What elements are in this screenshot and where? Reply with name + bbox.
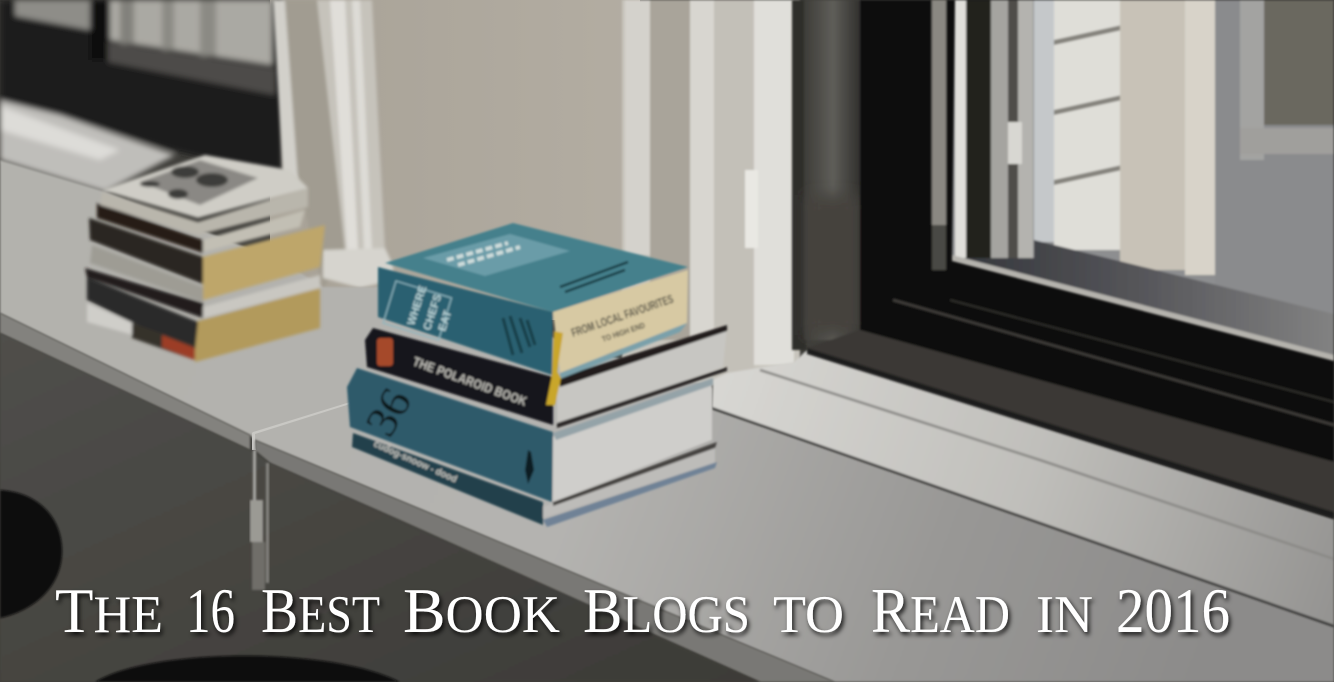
title: THE [55, 575, 163, 646]
window moulding [712, 350, 1334, 626]
cabinet seam and hinge [250, 450, 269, 590]
title [55, 575, 1230, 646]
book 4 bottom blue [352, 433, 717, 527]
column near left window [273, 0, 393, 290]
sill seam [252, 402, 350, 450]
book 3 blue [347, 368, 717, 506]
title: BEST [261, 575, 380, 646]
book 1 teal top: EAT [436, 309, 454, 333]
cabinet below the sill [0, 333, 760, 682]
spine text: cudog-snoow - dood [372, 439, 458, 485]
sill surface [0, 160, 1334, 682]
top book [100, 188, 308, 235]
title: IN [1036, 586, 1093, 644]
cover title lines [447, 243, 520, 265]
bottom yellow book [195, 288, 320, 362]
dark red book [97, 203, 203, 253]
number 36 on spine: 36 [356, 380, 421, 444]
title: BOOK [403, 575, 560, 646]
book 1 teal top: TO HIGH END [601, 321, 646, 344]
page-edge text: FROM LOCAL FAVOURITES [569, 292, 675, 340]
sill front edges [0, 313, 835, 682]
grey and yellow book [90, 245, 203, 302]
title: READ [871, 575, 1010, 646]
books: main stack [347, 223, 727, 527]
wall [270, 0, 640, 320]
window glass and outdoor view [952, 0, 1334, 361]
black book [89, 218, 203, 284]
left window in background [0, 0, 283, 192]
dark window frame [792, 0, 1334, 519]
title: TO [773, 586, 844, 644]
title: 2016 [1116, 575, 1230, 646]
dark stools in foreground [0, 490, 400, 682]
book 2 black polaroid [365, 325, 727, 428]
spine label [383, 281, 451, 340]
books: small blurred stack on the left [85, 155, 325, 362]
dark thin book [85, 268, 203, 318]
book 1 teal top [378, 223, 688, 405]
spine text: WHERE [405, 284, 430, 327]
right window trim [622, 0, 800, 385]
spine title: THE POLAROID BOOK [411, 354, 529, 409]
title: BLOGS [583, 575, 750, 646]
title: 16 [186, 575, 235, 646]
book 1 teal top: CHEFS [421, 293, 444, 332]
